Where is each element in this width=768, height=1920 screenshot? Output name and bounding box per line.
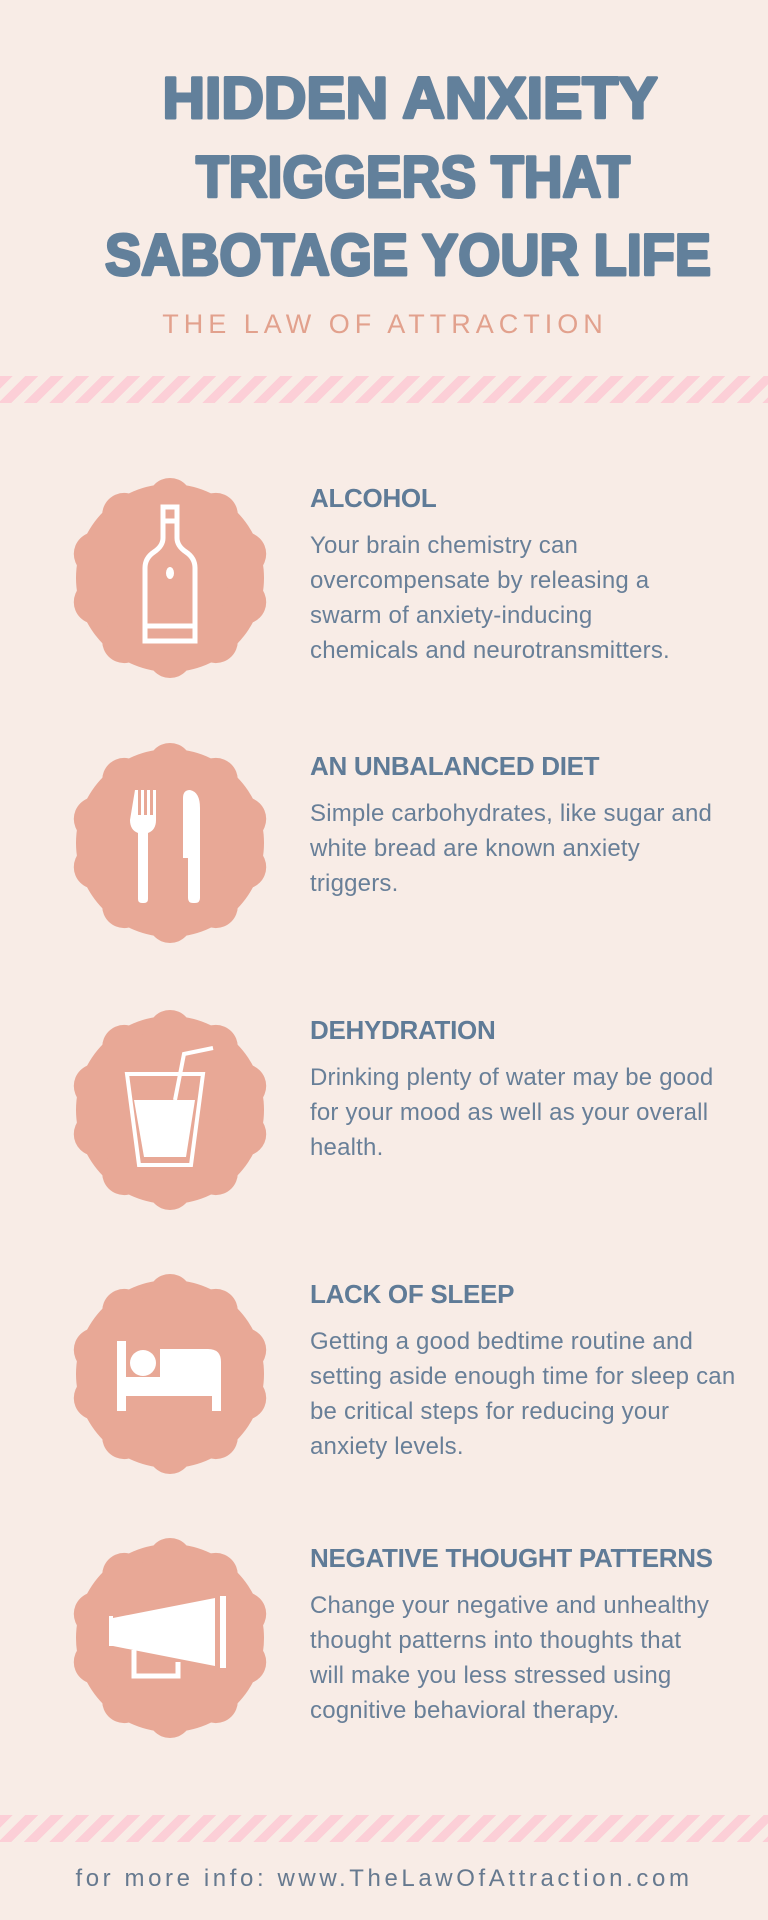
- title: [105, 66, 711, 288]
- item: sleep: anxiety levels.: [310, 1433, 464, 1460]
- badge: sleep: [74, 1274, 266, 1474]
- item: dehydration: [310, 1015, 713, 1161]
- icon: glass: [127, 1048, 213, 1165]
- item: diet: AN UNBALANCED DIET: [310, 751, 599, 781]
- icon: megaphone: [109, 1596, 226, 1676]
- title: SABOTAGE YOUR LIFE: [105, 223, 711, 288]
- item: sleep: LACK OF SLEEP: [310, 1279, 514, 1309]
- item: negative thoughts: NEGATIVE THOUGHT PATTERNS: [310, 1543, 713, 1573]
- item: dehydration: health.: [310, 1134, 383, 1161]
- item: diet: triggers.: [310, 870, 398, 897]
- item: negative thoughts: [310, 1543, 713, 1724]
- badge: dehydration: [74, 1010, 266, 1210]
- footer: for more info: www.TheLawOfAttraction.com: [75, 1865, 693, 1892]
- item: dehydration: Drinking plenty of water may be good: [310, 1064, 713, 1091]
- item: negative thoughts: will make you less stressed using: [310, 1662, 671, 1689]
- item: dehydration: for your mood as well as your overall: [310, 1099, 708, 1126]
- item: sleep: setting aside enough time for sleep can: [310, 1363, 735, 1390]
- item: negative thoughts: Change your negative and unhealthy: [310, 1592, 709, 1619]
- title: TRIGGERS THAT: [196, 145, 630, 210]
- item: alcohol: swarm of anxiety-inducing: [310, 602, 592, 629]
- icon: bed: [117, 1341, 221, 1411]
- item: alcohol: chemicals and neurotransmitters.: [310, 637, 670, 664]
- item: alcohol: [310, 483, 670, 664]
- item: alcohol: ALCOHOL: [310, 483, 436, 513]
- subtitle: THE LAW OF ATTRACTION: [162, 309, 608, 339]
- icon: bottle: [145, 507, 195, 641]
- item: sleep: Getting a good bedtime routine and: [310, 1328, 693, 1355]
- item: diet: white bread are known anxiety: [310, 835, 640, 862]
- item: sleep: [310, 1279, 735, 1460]
- badge: negative thoughts: [74, 1538, 266, 1738]
- item: negative thoughts: thought patterns into thoughts that: [310, 1627, 681, 1654]
- item: alcohol: Your brain chemistry can: [310, 532, 578, 559]
- item: diet: [310, 751, 712, 897]
- item: diet: Simple carbohydrates, like sugar and: [310, 800, 712, 827]
- item: negative thoughts: cognitive behavioral therapy.: [310, 1697, 620, 1724]
- item: sleep: be critical steps for reducing your: [310, 1398, 669, 1425]
- icon: fork and knife: [130, 790, 200, 903]
- badge: alcohol: [74, 478, 266, 678]
- item: alcohol: overcompensate by releasing a: [310, 567, 649, 594]
- badge: diet: [74, 743, 266, 943]
- title: HIDDEN ANXIETY: [162, 66, 658, 131]
- item: dehydration: DEHYDRATION: [310, 1015, 495, 1045]
